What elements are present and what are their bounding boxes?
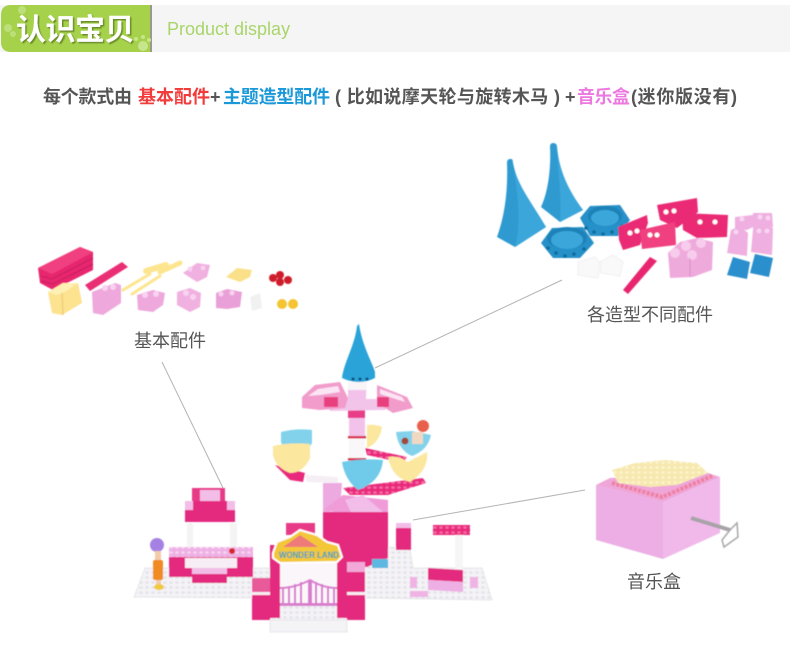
lilac bricks [727,213,773,256]
yellow studded plate [612,460,708,487]
yellow small bricks [226,268,252,282]
teacups [273,425,431,490]
label: 各造型不同配件: 各造型不同配件 [587,305,713,325]
label: 基本配件: 基本配件 [134,331,206,351]
box left face [596,485,663,559]
box right face [663,477,720,559]
yellow studs [277,299,298,309]
yellow sticks [123,263,180,294]
Wonder Land sign: WONDER LAND [279,550,339,561]
subtitle text line: + [210,87,221,107]
pink stick [623,257,657,294]
subtitle text line: 每个款式由 [43,87,132,107]
lilac bricks row [92,263,242,315]
header badge: green tab [1,5,152,52]
tower base box [323,483,388,568]
Wonder Land sign [273,530,342,563]
subtitle text line: ( 比如说摩天轮与旋转木马 ) [335,86,560,107]
side column and pergola [396,523,478,597]
panel: basic parts photo [38,247,298,315]
teacup platforms [275,448,426,495]
pink plate stack [38,247,93,290]
minifigure with purple hair [150,538,164,590]
base plates [134,547,492,632]
crank handle [691,518,738,547]
yellow bricks [48,283,82,315]
label: 音乐盒: 音乐盒 [627,572,681,592]
leader lines [162,280,585,520]
red stud row [612,476,712,497]
panel: music box [596,460,738,559]
pink strip [85,262,128,291]
panel: assembled carousel set [134,324,492,632]
subtitle text line [43,86,737,107]
entrance gate [252,523,365,620]
subtitle text line: + [565,87,576,107]
carousel canopy [302,382,413,413]
white bricks [578,255,623,278]
subtitle text line: (迷你版没有) [631,87,737,107]
panel: theme parts photo [497,143,773,294]
heading: 认识宝贝: 认识宝贝 [16,14,134,47]
tower column [348,382,367,462]
blue bricks [727,254,773,279]
box top [596,473,720,502]
pink fences [618,198,728,250]
subtitle text line: 主题造型配件 [223,87,330,107]
left stall [169,488,253,583]
minifigure in teacup [402,420,429,444]
subtitle text line: 基本配件 [138,87,210,107]
heading: Product display: Product display [167,19,290,39]
red studs [269,271,292,286]
header band [0,5,790,52]
subtitle text line: 音乐盒 [577,86,630,107]
blue cone roof [342,324,375,382]
white piece [250,293,262,311]
blue cones [497,143,583,247]
lilac cylinders [668,238,713,278]
blue rings [541,205,630,258]
